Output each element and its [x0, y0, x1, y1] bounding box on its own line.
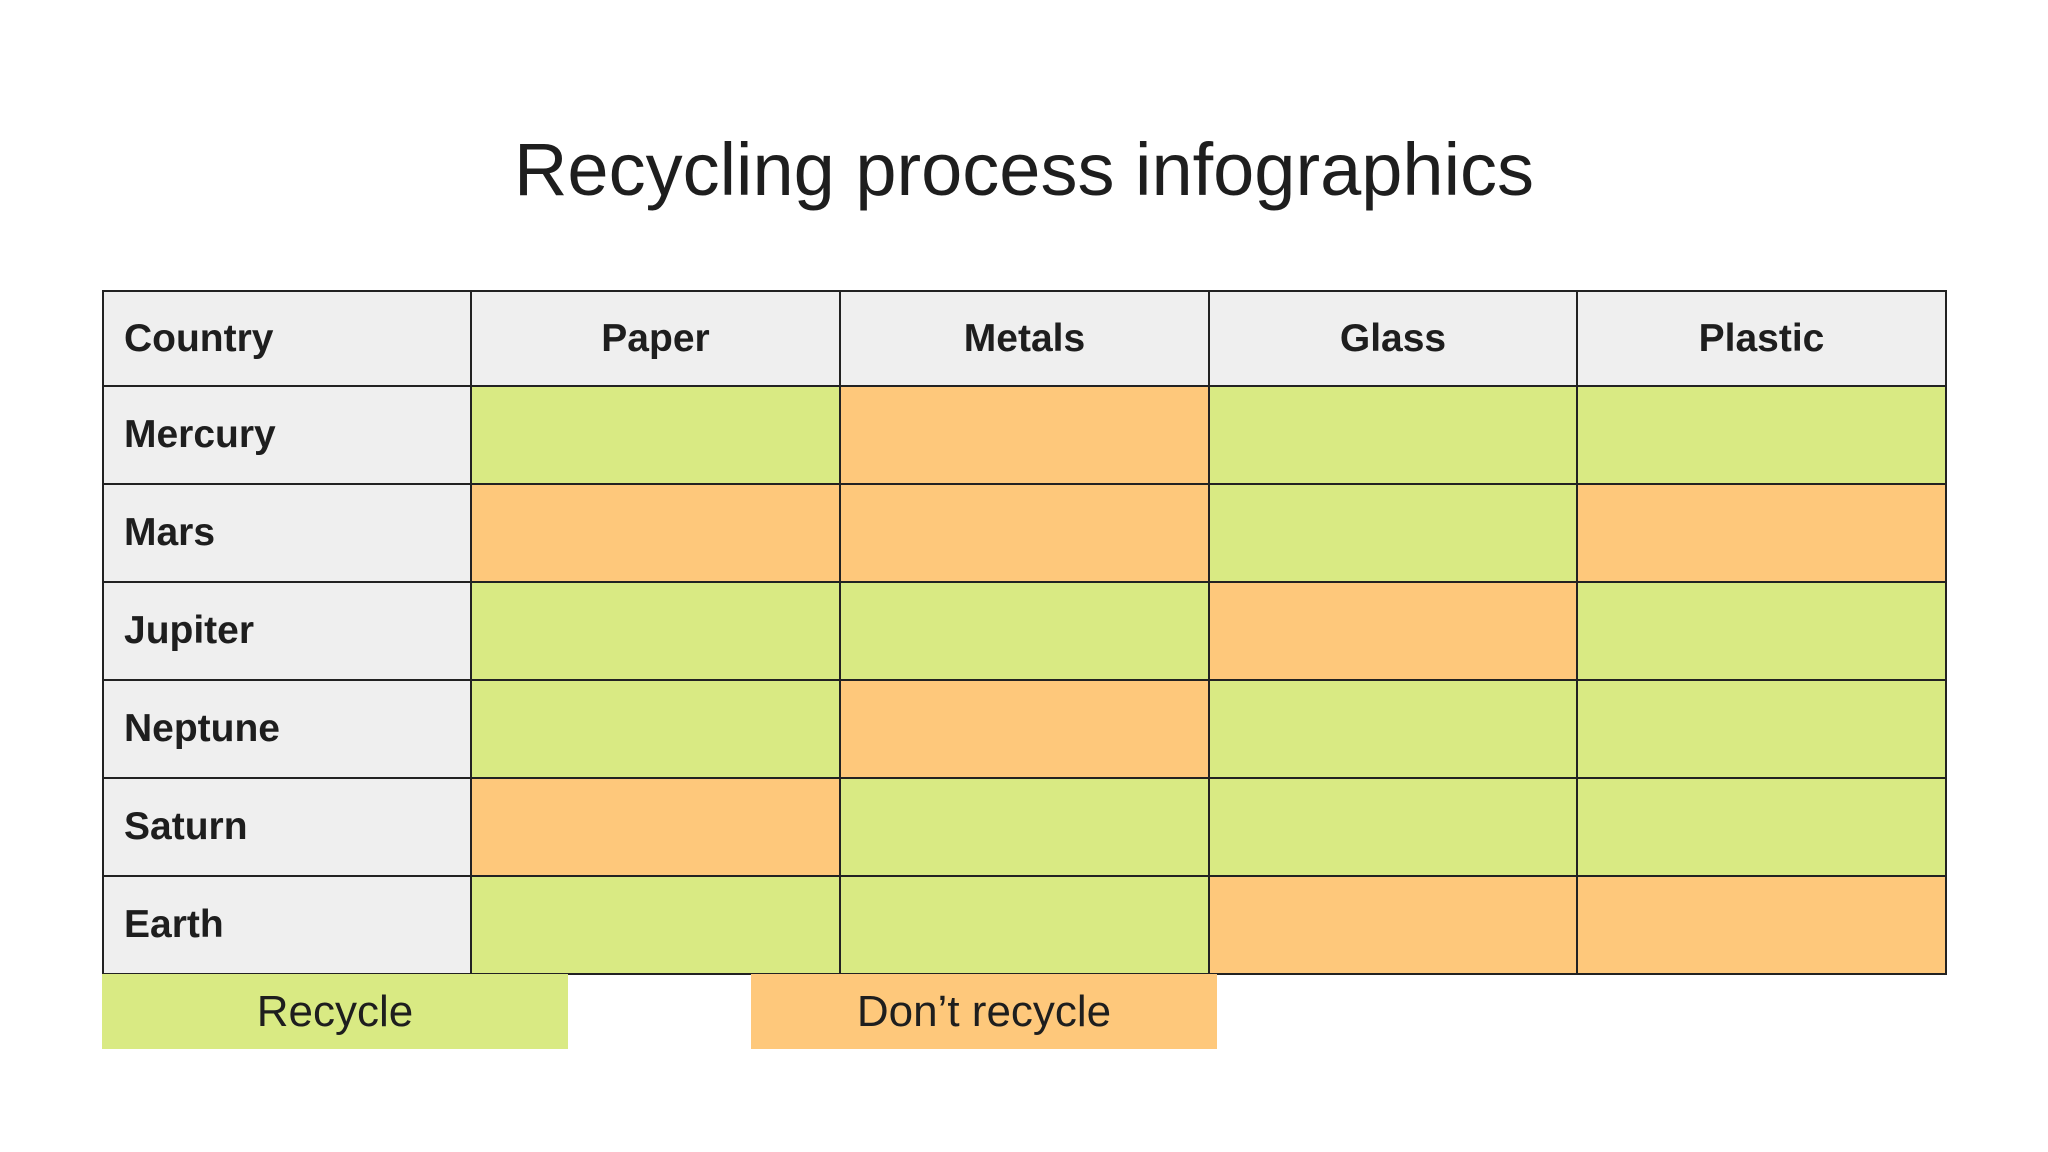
table: recycling matrix: Metals — [964, 316, 1085, 360]
table: recycling matrix: Earth — [124, 903, 224, 946]
legend: don't recycle: Don’t recycle — [857, 987, 1111, 1036]
table: recycling matrix: Jupiter — [124, 609, 254, 652]
legend: recycle — [102, 974, 568, 1049]
title: Recycling process infographics — [514, 128, 1534, 211]
table: recycling matrix: Mercury — [124, 413, 276, 456]
table: recycling matrix — [102, 290, 1947, 975]
table: recycling matrix: Plastic — [1699, 316, 1824, 360]
table: recycling matrix: Paper — [601, 316, 710, 360]
legend: recycle: Recycle — [257, 987, 413, 1036]
table: recycling matrix: Country — [124, 316, 274, 360]
table: recycling matrix: Neptune — [124, 707, 280, 750]
table: recycling matrix: Saturn — [124, 805, 248, 848]
legend: don't recycle — [751, 974, 1217, 1049]
table: recycling matrix: Glass — [1340, 316, 1446, 360]
table: recycling matrix: Mars — [124, 511, 215, 554]
